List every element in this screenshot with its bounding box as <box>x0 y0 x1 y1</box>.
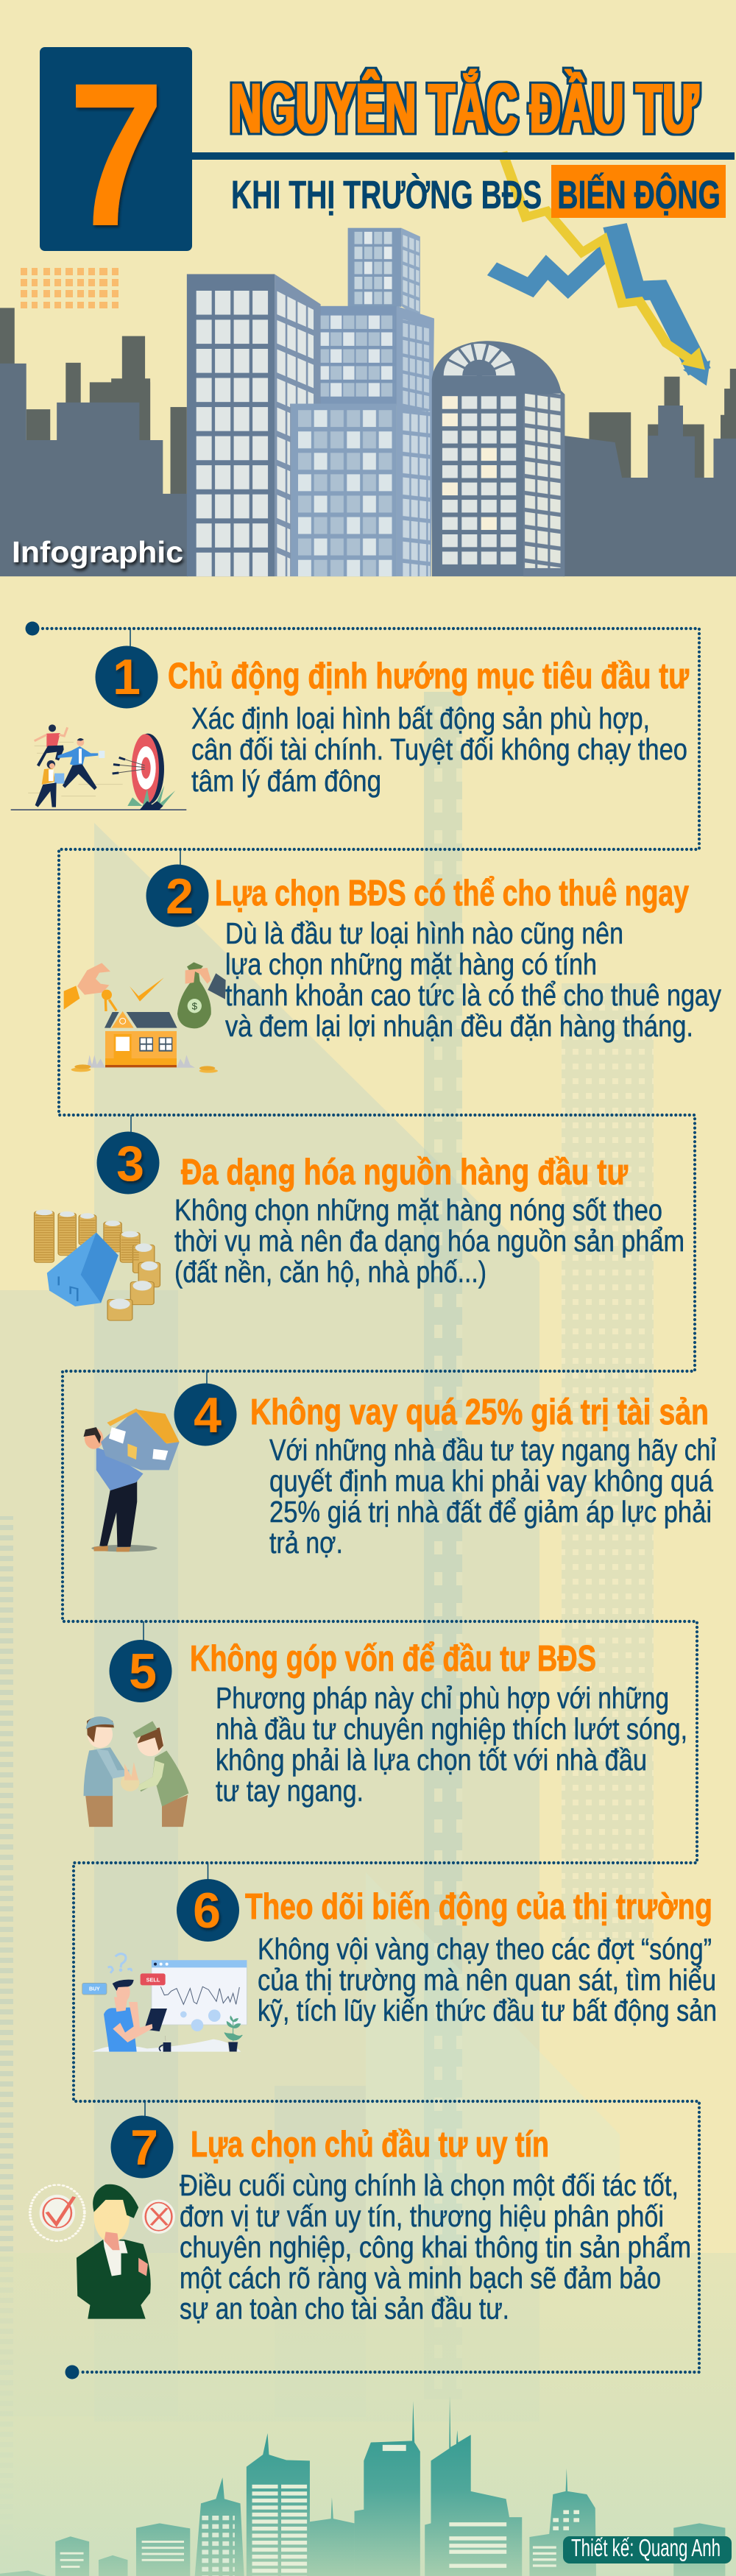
body text 5: tư tay ngang. <box>216 1774 364 1808</box>
body text 2: Dù là đầu tư loại hình nào cũng nên <box>225 916 623 950</box>
icon: thoughtful man with tick and cross <box>30 2184 175 2319</box>
number badge 2: 2 <box>166 868 194 924</box>
body text 1: tâm lý đám đông <box>191 764 381 798</box>
body text 1: Xác định loại hình bất động sản phù hợp, <box>191 701 650 735</box>
number badge 3 <box>97 1115 159 1194</box>
body text 7: sự an toàn cho tài sản đầu tư. <box>180 2292 509 2326</box>
panel: step 1 <box>11 629 689 810</box>
body text 3: (đất nền, căn hộ, nhà phố...) <box>174 1255 486 1289</box>
icon: man analysing market chart: SELL <box>146 1976 160 1983</box>
heading 3: Đa dạng hóa nguồn hàng đầu tư <box>181 1153 628 1192</box>
tower: dome <box>432 341 565 576</box>
body text 1 <box>191 701 687 798</box>
number badge 3: 3 <box>116 1136 144 1192</box>
body text 5: không phải là lựa chọn tốt với nhà đầu <box>216 1743 647 1777</box>
number badge 6 <box>177 1863 239 1942</box>
label: Infographic: Infographic <box>12 535 183 569</box>
icon: house, key and money bag <box>64 962 226 1073</box>
body text 4: trả nợ. <box>269 1526 343 1560</box>
body text 2: lựa chọn những mặt hàng có tính <box>225 947 597 981</box>
panel: step 6 <box>82 1863 717 2052</box>
body text 3 <box>174 1193 684 1289</box>
number badge 4: 4 <box>194 1387 222 1443</box>
number badge 1: 1 <box>113 649 141 705</box>
number badge 4 <box>174 1371 237 1446</box>
icon: man analysing market chart <box>82 1954 247 2052</box>
title rule <box>192 152 735 160</box>
panel: step 2 <box>64 849 721 1073</box>
number badge 2 <box>146 849 209 927</box>
icon: man analysing market chart: BUY <box>89 1987 100 1992</box>
body text 4 <box>269 1433 716 1560</box>
title number box: 7 <box>68 40 164 269</box>
panel: step 4 <box>84 1371 716 1560</box>
number badge 1 <box>96 629 158 708</box>
footer skyline <box>0 2396 725 2576</box>
body text 5 <box>216 1681 687 1808</box>
panel: step 3 <box>35 1115 684 1320</box>
icon: house, key and money bag: $ <box>192 1001 198 1012</box>
subtitle highlight <box>551 165 726 218</box>
number badge 7 <box>110 2101 174 2179</box>
icon: people running to target <box>11 724 186 810</box>
heading 7: Lựa chọn chủ đầu tư uy tín <box>191 2125 549 2165</box>
number badge 7: 7 <box>130 2120 158 2176</box>
icon: two men shaking hands <box>84 1716 188 1827</box>
body text 6 <box>258 1932 717 2027</box>
panel: step 7 <box>30 2101 691 2326</box>
panel: step 5 <box>84 1621 687 1827</box>
decorative orange window grid <box>21 268 118 308</box>
body text 2 <box>225 916 721 1043</box>
tower: back middle <box>291 228 434 576</box>
header skyline illustration <box>0 152 736 576</box>
tower: left <box>187 274 321 576</box>
number badge 5: 5 <box>129 1643 157 1699</box>
number badge 6: 6 <box>193 1883 221 1939</box>
icon: house and coin stacks <box>35 1209 160 1320</box>
dotted timeline <box>25 621 699 2379</box>
icon: man carrying house <box>84 1409 180 1551</box>
arrow: falling market lines <box>492 152 710 386</box>
body text 7 <box>180 2168 691 2326</box>
heading 5: Không góp vốn để đầu tư BĐS <box>190 1639 596 1679</box>
number badge 5 <box>109 1621 172 1702</box>
